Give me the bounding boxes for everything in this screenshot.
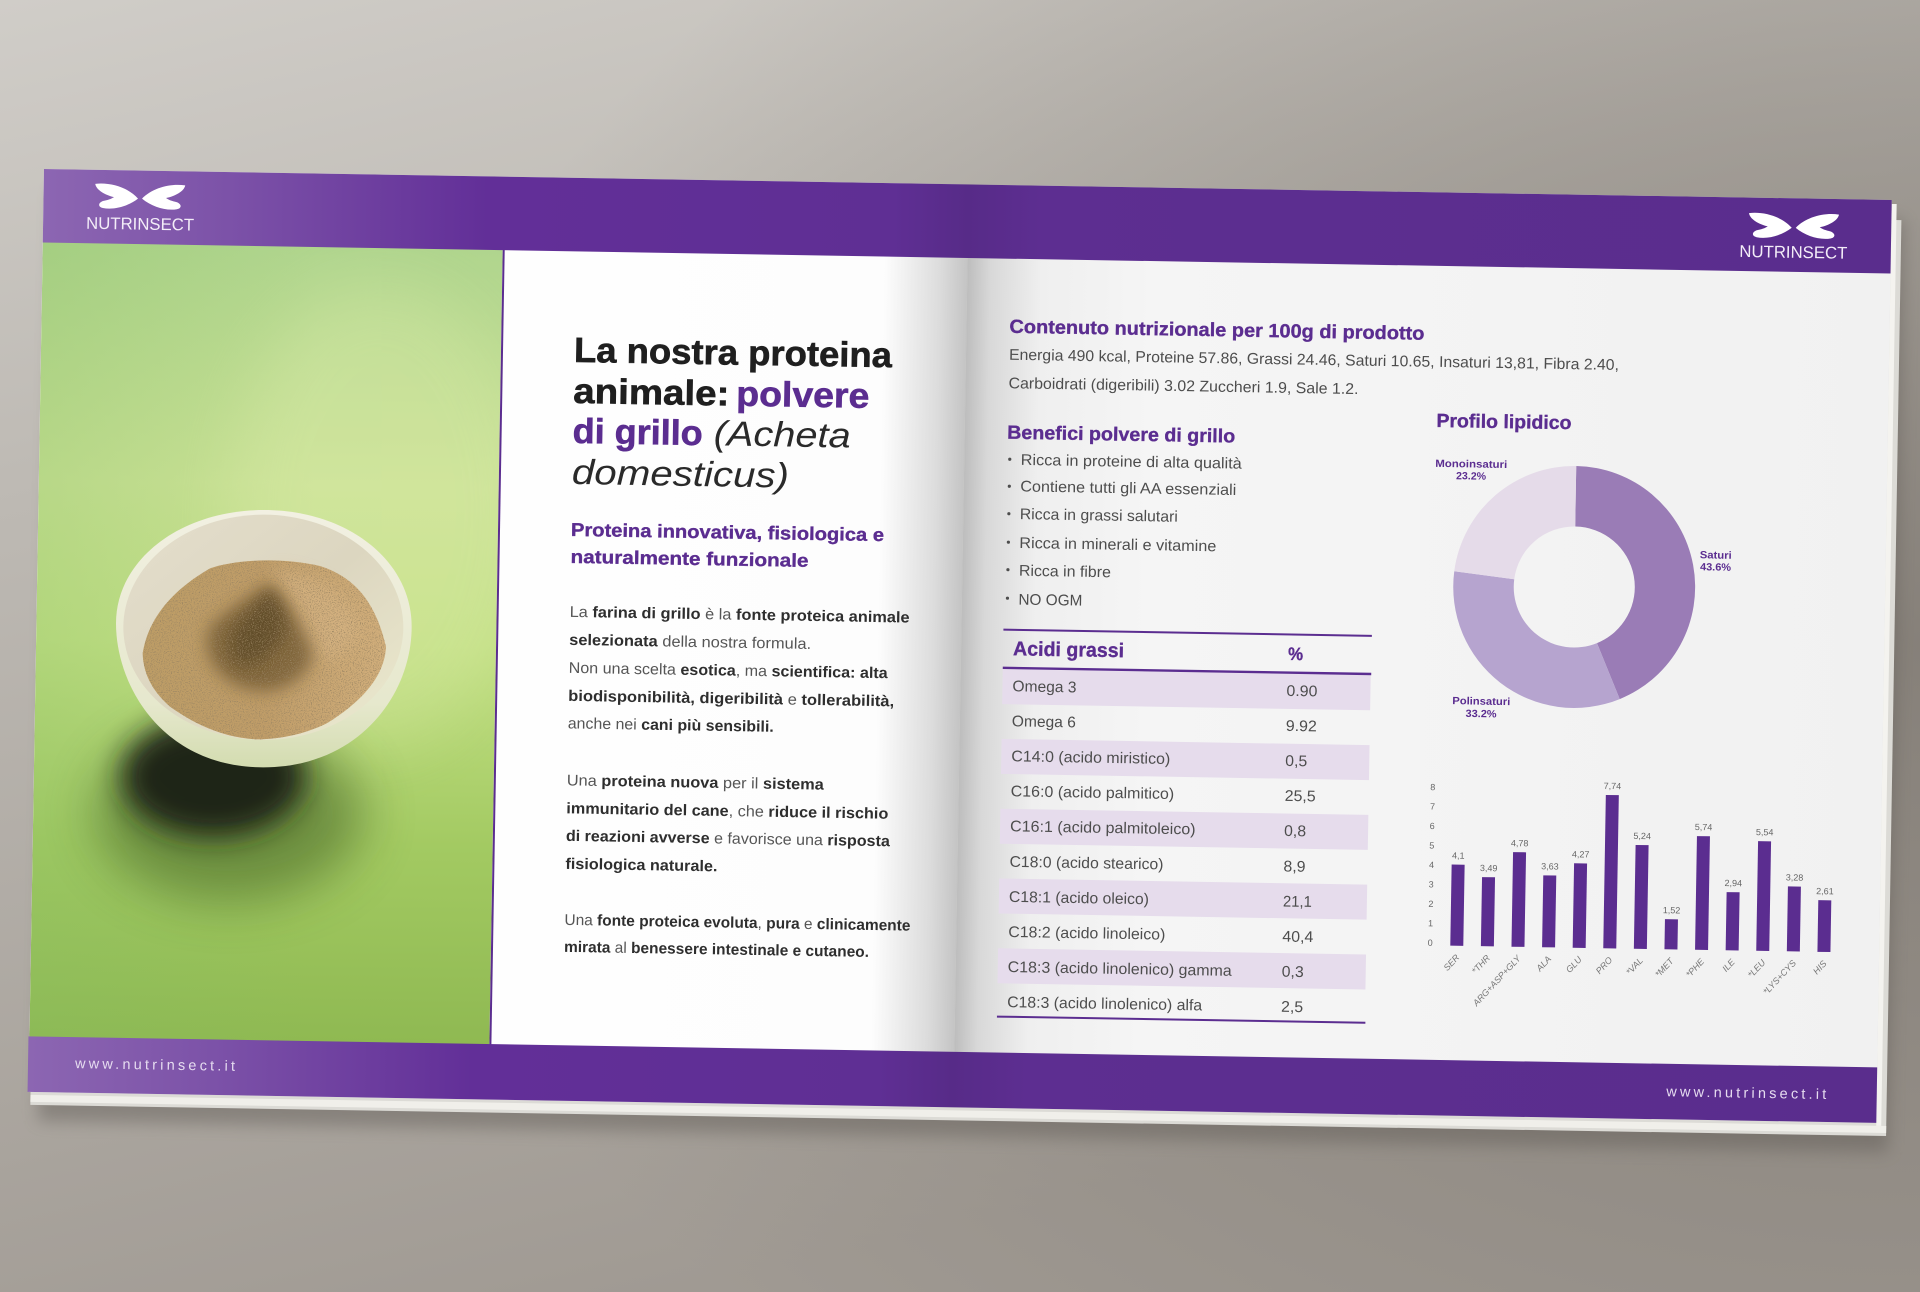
lipid profile heading: Profilo lipidico bbox=[1436, 411, 1572, 434]
panel: photo of cricket powder bowl bbox=[29, 242, 533, 1045]
title: (Acheta bbox=[713, 414, 851, 456]
table rows: 9.92 bbox=[1286, 718, 1317, 735]
benefits list: Contiene tutti gli AA essenziali bbox=[1020, 478, 1236, 499]
category labels: *LYS+CYS bbox=[1761, 958, 1798, 997]
label: saturi: Saturi bbox=[1700, 549, 1732, 562]
table rows: C18:3 (acido linolenico) gamma bbox=[1008, 959, 1232, 980]
table rows: 40,4 bbox=[1282, 929, 1314, 946]
footer band bbox=[28, 1036, 1877, 1123]
icon: butterfly wings bbox=[1749, 213, 1839, 239]
body text: immunitario del cane , che riduce il rischio bbox=[566, 800, 888, 823]
table rows: 21,1 bbox=[1283, 893, 1312, 911]
body text: anche nei cani più sensibili. bbox=[568, 715, 774, 736]
table rows: 0,5 bbox=[1285, 753, 1307, 770]
bar values: 3,49 bbox=[1480, 863, 1498, 873]
title: di grillo bbox=[572, 412, 703, 453]
benefits list bbox=[1006, 452, 1242, 612]
body text: di reazioni avverse e favorisce una risposta bbox=[566, 828, 890, 850]
body text: biodisponibilità, digeribilità e tollerabilità, bbox=[568, 688, 894, 710]
bar values: 4,1 bbox=[1452, 850, 1465, 861]
table rows: 2,5 bbox=[1281, 999, 1303, 1016]
table header: % bbox=[1288, 644, 1303, 664]
icon: butterfly wings bbox=[95, 183, 185, 210]
y axis labels bbox=[1428, 782, 1435, 948]
bar values: 1,52 bbox=[1663, 905, 1680, 915]
table rows bbox=[1007, 678, 1318, 1016]
photo divider line bbox=[489, 250, 505, 1045]
table rows: C18:2 (acido linoleico) bbox=[1008, 924, 1165, 944]
category labels: *THR bbox=[1470, 953, 1492, 976]
table rows: Omega 3 bbox=[1012, 678, 1077, 696]
label: monoinsaturi: Monoinsaturi bbox=[1435, 458, 1507, 471]
category labels: HIS bbox=[1811, 959, 1829, 976]
body text bbox=[564, 604, 916, 962]
title: animale: bbox=[573, 372, 730, 414]
table header bbox=[1013, 638, 1303, 665]
y axis labels: 1 bbox=[1428, 918, 1433, 928]
label: polinsaturi: 33.2% bbox=[1465, 708, 1497, 720]
table rows: C18:3 (acido linolenico) alfa bbox=[1007, 994, 1203, 1014]
bar values: 3,28 bbox=[1786, 872, 1803, 883]
table header: Acidi grassi bbox=[1013, 638, 1124, 662]
body text: La farina di grillo è la fonte proteica animale bbox=[570, 604, 910, 627]
category labels: ARG+ASP+GLY bbox=[1470, 953, 1523, 1009]
segment: saturi bbox=[1572, 466, 1697, 700]
nutrition text bbox=[1008, 347, 1619, 402]
bar values: 5,54 bbox=[1756, 827, 1774, 837]
bar values: 5,24 bbox=[1633, 831, 1651, 841]
table rows: 25,5 bbox=[1285, 788, 1316, 805]
bar values bbox=[1451, 778, 1835, 918]
title: polvere bbox=[736, 375, 870, 416]
title bbox=[572, 331, 893, 497]
logo left bbox=[86, 183, 195, 235]
body text: mirata al benessere intestinale e cutaneo. bbox=[564, 939, 869, 961]
footer url left: www.nutrinsect.it bbox=[74, 1056, 235, 1075]
benefits heading: Benefici polvere di grillo bbox=[1007, 423, 1235, 447]
benefits list: Ricca in minerali e vitamine bbox=[1019, 535, 1216, 555]
category labels: *LEU bbox=[1746, 957, 1768, 980]
body text: fisiologica naturale. bbox=[565, 856, 718, 875]
table: acidi grassi bbox=[997, 629, 1372, 1024]
bar values: 2,94 bbox=[1724, 878, 1742, 888]
subtitle bbox=[570, 519, 884, 572]
y axis labels: 0 bbox=[1428, 938, 1433, 948]
powder highlight bbox=[277, 572, 348, 654]
category labels bbox=[1441, 951, 1829, 1015]
benefits list: Ricca in proteine di alta qualità bbox=[1021, 452, 1242, 473]
nutrition heading: Contenuto nutrizionale per 100g di prodotto bbox=[1009, 317, 1425, 345]
segment: polinsaturi bbox=[1451, 571, 1622, 709]
y axis labels: 7 bbox=[1430, 802, 1435, 812]
category labels: ILE bbox=[1720, 956, 1737, 974]
category labels: SER bbox=[1442, 952, 1462, 973]
body text: Una fonte proteica evoluta, pura e clinicamente bbox=[564, 912, 911, 935]
footer url right: www.nutrinsect.it bbox=[1665, 1084, 1826, 1103]
label: saturi: 43.6% bbox=[1700, 561, 1732, 574]
bowl soft shadow bbox=[97, 727, 363, 900]
table rows: 0.90 bbox=[1286, 683, 1318, 700]
bar values: 4,27 bbox=[1572, 849, 1590, 859]
right page bbox=[953, 184, 1892, 1123]
label: monoinsaturi bbox=[1435, 458, 1507, 483]
body text: Non una scelta esotica, ma scientifica: alta bbox=[569, 660, 888, 682]
table rows: 0,8 bbox=[1284, 823, 1306, 840]
y axis labels: 4 bbox=[1429, 860, 1434, 870]
table bands bbox=[997, 669, 1371, 989]
y axis labels: 6 bbox=[1430, 821, 1435, 831]
category labels: *PHE bbox=[1684, 956, 1707, 979]
bowl dark shadow bbox=[122, 717, 305, 837]
benefits list: Ricca in fibre bbox=[1019, 563, 1111, 581]
bar values: 7,74 bbox=[1604, 781, 1621, 791]
bar chart: amino acids bbox=[1427, 778, 1835, 1015]
bar values: 4,78 bbox=[1511, 838, 1529, 848]
body text: selezionata della nostra formula. bbox=[569, 632, 811, 653]
subtitle: naturalmente funzionale bbox=[570, 546, 809, 571]
logo right bbox=[1739, 212, 1848, 263]
left page bbox=[29, 169, 969, 1107]
benefits list: Ricca in grassi salutari bbox=[1020, 506, 1178, 526]
category labels: *VAL bbox=[1624, 955, 1645, 977]
photo left tone bbox=[30, 242, 200, 970]
y axis labels: 2 bbox=[1428, 899, 1433, 909]
brochure bbox=[27, 169, 1904, 1152]
label: monoinsaturi: 23.2% bbox=[1456, 470, 1487, 483]
bar values: 2,61 bbox=[1816, 886, 1834, 896]
title: domesticus) bbox=[572, 453, 789, 496]
segment: monoinsaturi bbox=[1454, 464, 1576, 580]
category labels: PRO bbox=[1594, 955, 1614, 976]
bar values: 3,63 bbox=[1541, 861, 1559, 872]
nutrition text: Carboidrati (digeribili) 3.02 Zuccheri 1.9, Sale 1.2. bbox=[1008, 375, 1359, 398]
page stack under brochure bbox=[30, 173, 1904, 1152]
title: La nostra proteina bbox=[574, 331, 893, 375]
label: polinsaturi bbox=[1452, 695, 1510, 721]
table rows: C16:1 (acido palmitoleico) bbox=[1010, 818, 1196, 838]
subtitle: Proteina innovativa, fisiologica e bbox=[571, 519, 884, 545]
header band bbox=[43, 169, 1892, 273]
category labels: GLU bbox=[1564, 954, 1584, 975]
table rows: C14:0 (acido miristico) bbox=[1011, 748, 1170, 768]
bar values: 5,74 bbox=[1695, 822, 1712, 832]
y axis labels: 8 bbox=[1430, 782, 1435, 792]
bowl bbox=[116, 510, 412, 767]
powder grain bbox=[143, 560, 386, 739]
y axis labels: 5 bbox=[1429, 841, 1434, 851]
category labels: *MET bbox=[1653, 955, 1677, 979]
photo highlight bbox=[296, 306, 486, 738]
category labels: ALA bbox=[1534, 954, 1553, 974]
table rows: Omega 6 bbox=[1012, 713, 1076, 731]
table rows: C18:0 (acido stearico) bbox=[1009, 854, 1164, 873]
logo wordmark: NUTRINSECT bbox=[86, 214, 194, 235]
powder mound dark bbox=[207, 584, 313, 691]
body text: Una proteina nuova per il sistema bbox=[567, 772, 824, 794]
table rows: 0,3 bbox=[1282, 964, 1304, 981]
table rows: 8,9 bbox=[1283, 858, 1306, 876]
label: polinsaturi: Polinsaturi bbox=[1452, 695, 1510, 708]
nutrition text: Energia 490 kcal, Proteine 57.86, Grassi 24.46, Saturi 10.65, Insaturi 13,81, Fibra 2.40, bbox=[1009, 347, 1619, 374]
bars bbox=[1450, 792, 1833, 952]
table rows: C16:0 (acido palmitico) bbox=[1011, 783, 1174, 803]
benefits list: NO OGM bbox=[1018, 592, 1083, 610]
label: saturi bbox=[1699, 549, 1732, 574]
logo wordmark: NUTRINSECT bbox=[1739, 242, 1848, 263]
donut chart: profilo lipidico bbox=[1431, 458, 1733, 724]
table rows: C18:1 (acido oleico) bbox=[1009, 889, 1149, 908]
powder bbox=[143, 560, 386, 739]
y axis labels: 3 bbox=[1429, 879, 1434, 889]
